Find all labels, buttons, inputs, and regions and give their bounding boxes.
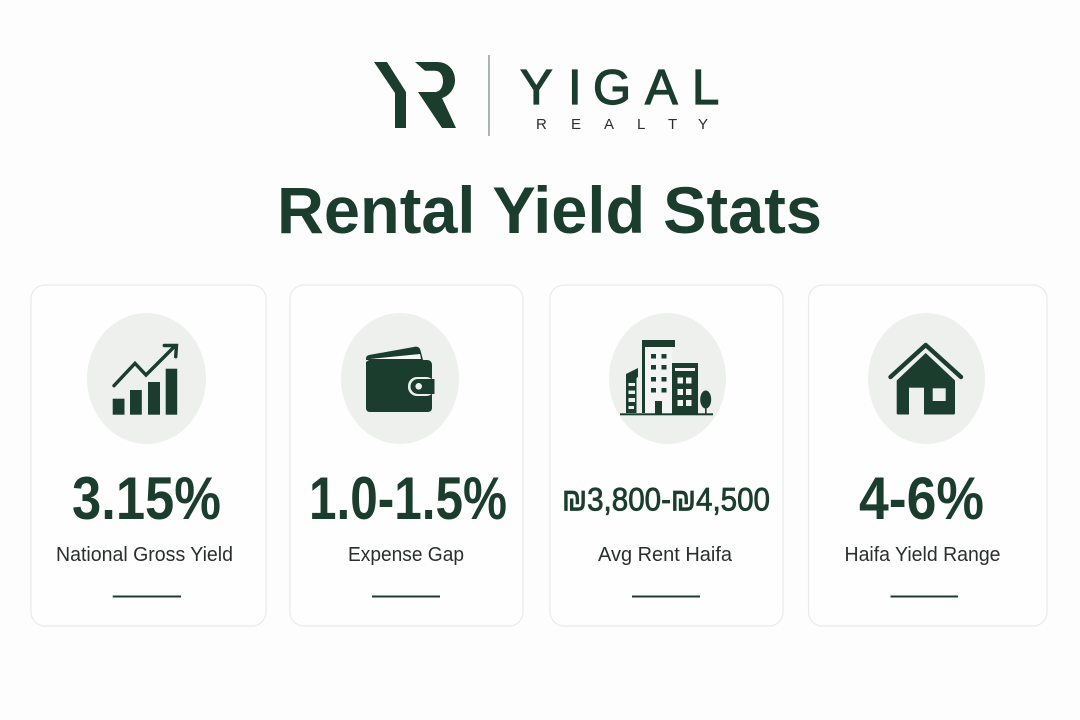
logo: Yigal Realty [374,55,719,136]
icon: city buildings [620,340,713,415]
value: rent range: ₪3,800-₪4,500 [562,482,770,518]
value: 1.0-1.5%: 1.0-1.5% [309,465,507,532]
panel: Avg Rent Haifa [550,285,783,626]
logo sub-wordmark: REALTY: REALTY [536,116,708,133]
panel: Expense Gap [290,285,523,626]
panel: Haifa Yield Range [808,285,1047,626]
value: 4-6%: 4-6% [859,465,984,532]
panel: National Gross Yield [31,285,266,626]
title: Rental Yield Stats [277,173,822,247]
label: National Gross Yield: National Gross Yield [56,544,233,566]
label: Expense Gap: Expense Gap [348,544,464,566]
logo mark: YR monogram [374,62,456,128]
label: Avg Rent Haifa: Avg Rent Haifa [598,544,733,566]
label: Haifa Yield Range: Haifa Yield Range [844,544,1000,566]
icon: wallet [366,347,435,412]
icon: rising bar chart [113,346,177,415]
logo wordmark: YIGAL: YIGAL [520,61,719,115]
icon: house [890,345,961,415]
value: 3.15%: 3.15% [72,465,221,532]
